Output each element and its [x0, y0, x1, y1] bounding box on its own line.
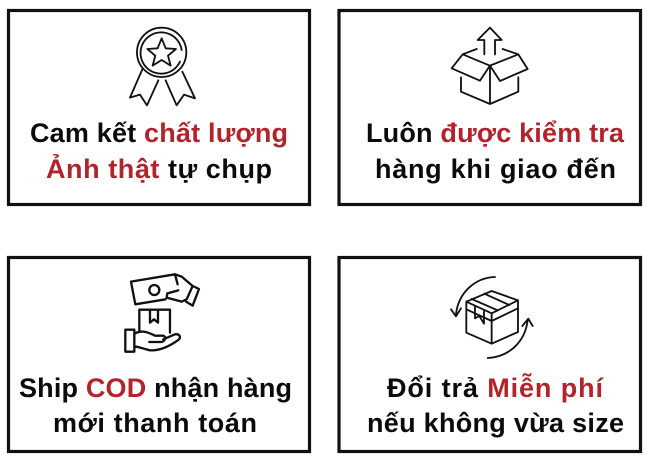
text: cash on delivery: Ship COD nhận hàng — [19, 373, 292, 403]
text: cash on delivery — [19, 373, 292, 438]
text: inspect on delivery: hàng khi giao đến — [375, 154, 616, 184]
text: free returns: nếu không vừa size — [367, 408, 624, 438]
icon: money and parcel in hands — [125, 274, 199, 352]
panel: cash on delivery — [8, 258, 310, 452]
text: inspect on delivery: Luôn được kiểm tra — [366, 118, 625, 148]
text: quality commitment: Ảnh thật tự chụp — [46, 152, 272, 184]
text: quality commitment: Cam kết chất lượng — [30, 118, 288, 148]
text: quality commitment — [30, 118, 288, 184]
icon: award ribbon — [130, 28, 195, 105]
text: free returns — [367, 372, 624, 438]
icon: open box with arrow — [452, 28, 528, 104]
text: cash on delivery: mới thanh toán — [53, 408, 257, 438]
icon: parcel with circular arrows — [451, 277, 533, 358]
panel: quality commitment — [8, 10, 310, 204]
panel: free returns — [339, 258, 640, 452]
text: free returns: Đổi trả Miễn phí — [387, 372, 604, 403]
panel: inspect on delivery — [339, 10, 640, 204]
text: inspect on delivery — [366, 118, 625, 184]
